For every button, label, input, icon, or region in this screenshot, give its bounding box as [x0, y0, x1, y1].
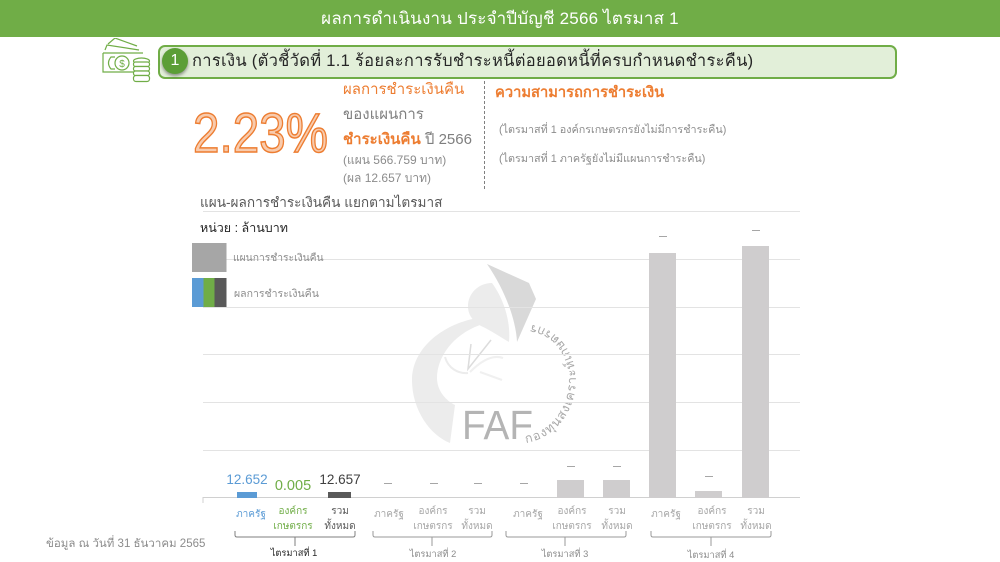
axis labels: ไตรมาสที่ 4 — [688, 550, 734, 560]
axis labels: องค์กร — [278, 506, 308, 517]
number badge: 1 — [171, 52, 179, 69]
title banner — [0, 0, 1000, 37]
repayment summary text: ชำระเงินคืน ปี 2566 — [343, 131, 472, 148]
repayment summary text — [343, 81, 472, 185]
axis labels: ทั้งหมด — [324, 521, 356, 532]
axis labels: องค์กร — [697, 506, 726, 517]
section heading bar — [158, 45, 897, 79]
repayment summary text: (ผล 12.657 บาท) — [343, 171, 431, 185]
result legend — [192, 278, 319, 307]
axis labels: เกษตรกร — [552, 521, 592, 532]
axis labels: ภาครัฐ — [513, 509, 543, 520]
repayment ability notes: (ไตรมาสที่ 1 องค์กรเกษตรกรยังไม่มีการชำระคืน) — [499, 124, 726, 136]
axis labels: เกษตรกร — [413, 521, 453, 532]
axis labels: ไตรมาสที่ 1 — [271, 548, 317, 558]
axis labels: รวม — [747, 506, 765, 517]
repayment summary text: ของแผนการ — [343, 106, 424, 123]
value dashes — [384, 230, 760, 484]
repayment ability notes — [499, 122, 726, 165]
axis labels: ภาครัฐ — [374, 509, 404, 520]
section heading text: การเงิน (ตัวชี้วัดที่ 1.1 ร้อยละการรับชำระหนี้ต่อยอดหนี้ที่ครบกำหนดชำระคืน) — [192, 52, 753, 70]
icon: money and coins — [102, 38, 150, 82]
axis labels: ทั้งหมด — [601, 521, 633, 532]
axis labels: ภาครัฐ — [236, 509, 266, 520]
watermark logo: FAF — [462, 402, 533, 448]
axis labels: ทั้งหมด — [461, 521, 493, 532]
quarter 2 to 4 bars — [557, 246, 769, 498]
chart unit: หน่วย : ล้านบาท — [200, 221, 288, 235]
quarter 1 bars: 12.657 — [319, 472, 361, 487]
repayment summary text: ผลการชำระเงินคืน — [343, 81, 464, 98]
axis labels: ภาครัฐ — [651, 509, 681, 520]
brackets — [235, 531, 771, 546]
result legend: ผลการชำระเงินคืน — [234, 287, 319, 300]
axis labels: เกษตรกร — [273, 521, 313, 532]
repayment ability heading: ความสามารถการชำระเงิน — [495, 85, 664, 101]
axis labels: องค์กร — [557, 506, 586, 517]
axis labels: องค์กร — [418, 506, 448, 517]
quarter 1 bars — [226, 472, 361, 498]
number badge — [162, 48, 188, 74]
data date note: ข้อมูล ณ วันที่ 31 ธันวาคม 2565 — [46, 538, 205, 550]
chart title: แผน-ผลการชำระเงินคืน แยกตามไตรมาส — [200, 195, 442, 210]
plan legend — [192, 243, 324, 272]
axis labels: ทั้งหมด — [740, 521, 772, 532]
icon: money and coins: $ — [119, 59, 125, 70]
repayment summary text: (แผน 566.759 บาท) — [343, 153, 446, 167]
axis labels: รวม — [608, 506, 626, 517]
axis labels: เกษตรกร — [692, 521, 732, 532]
axis labels — [236, 505, 772, 560]
watermark logo: กองทุนสงเคราะห์เกษตรกร — [526, 325, 576, 443]
quarter 1 bars: 0.005 — [275, 478, 311, 494]
axis labels: รวม — [331, 506, 349, 517]
axis labels: ไตรมาสที่ 3 — [542, 549, 588, 559]
title banner: ผลการดำเนินงาน ประจำปีบัญชี 2566 ไตรมาส 1 — [321, 9, 679, 28]
axis labels: ไตรมาสที่ 2 — [410, 549, 456, 559]
repayment ability notes: (ไตรมาสที่ 1 ภาครัฐยังไม่มีแผนการชำระคืน) — [499, 153, 705, 165]
watermark logo — [412, 264, 576, 448]
axis labels: รวม — [468, 506, 486, 517]
quarter 1 bars: 12.652 — [226, 472, 268, 487]
plan legend: แผนการชำระเงินคืน — [233, 251, 324, 264]
